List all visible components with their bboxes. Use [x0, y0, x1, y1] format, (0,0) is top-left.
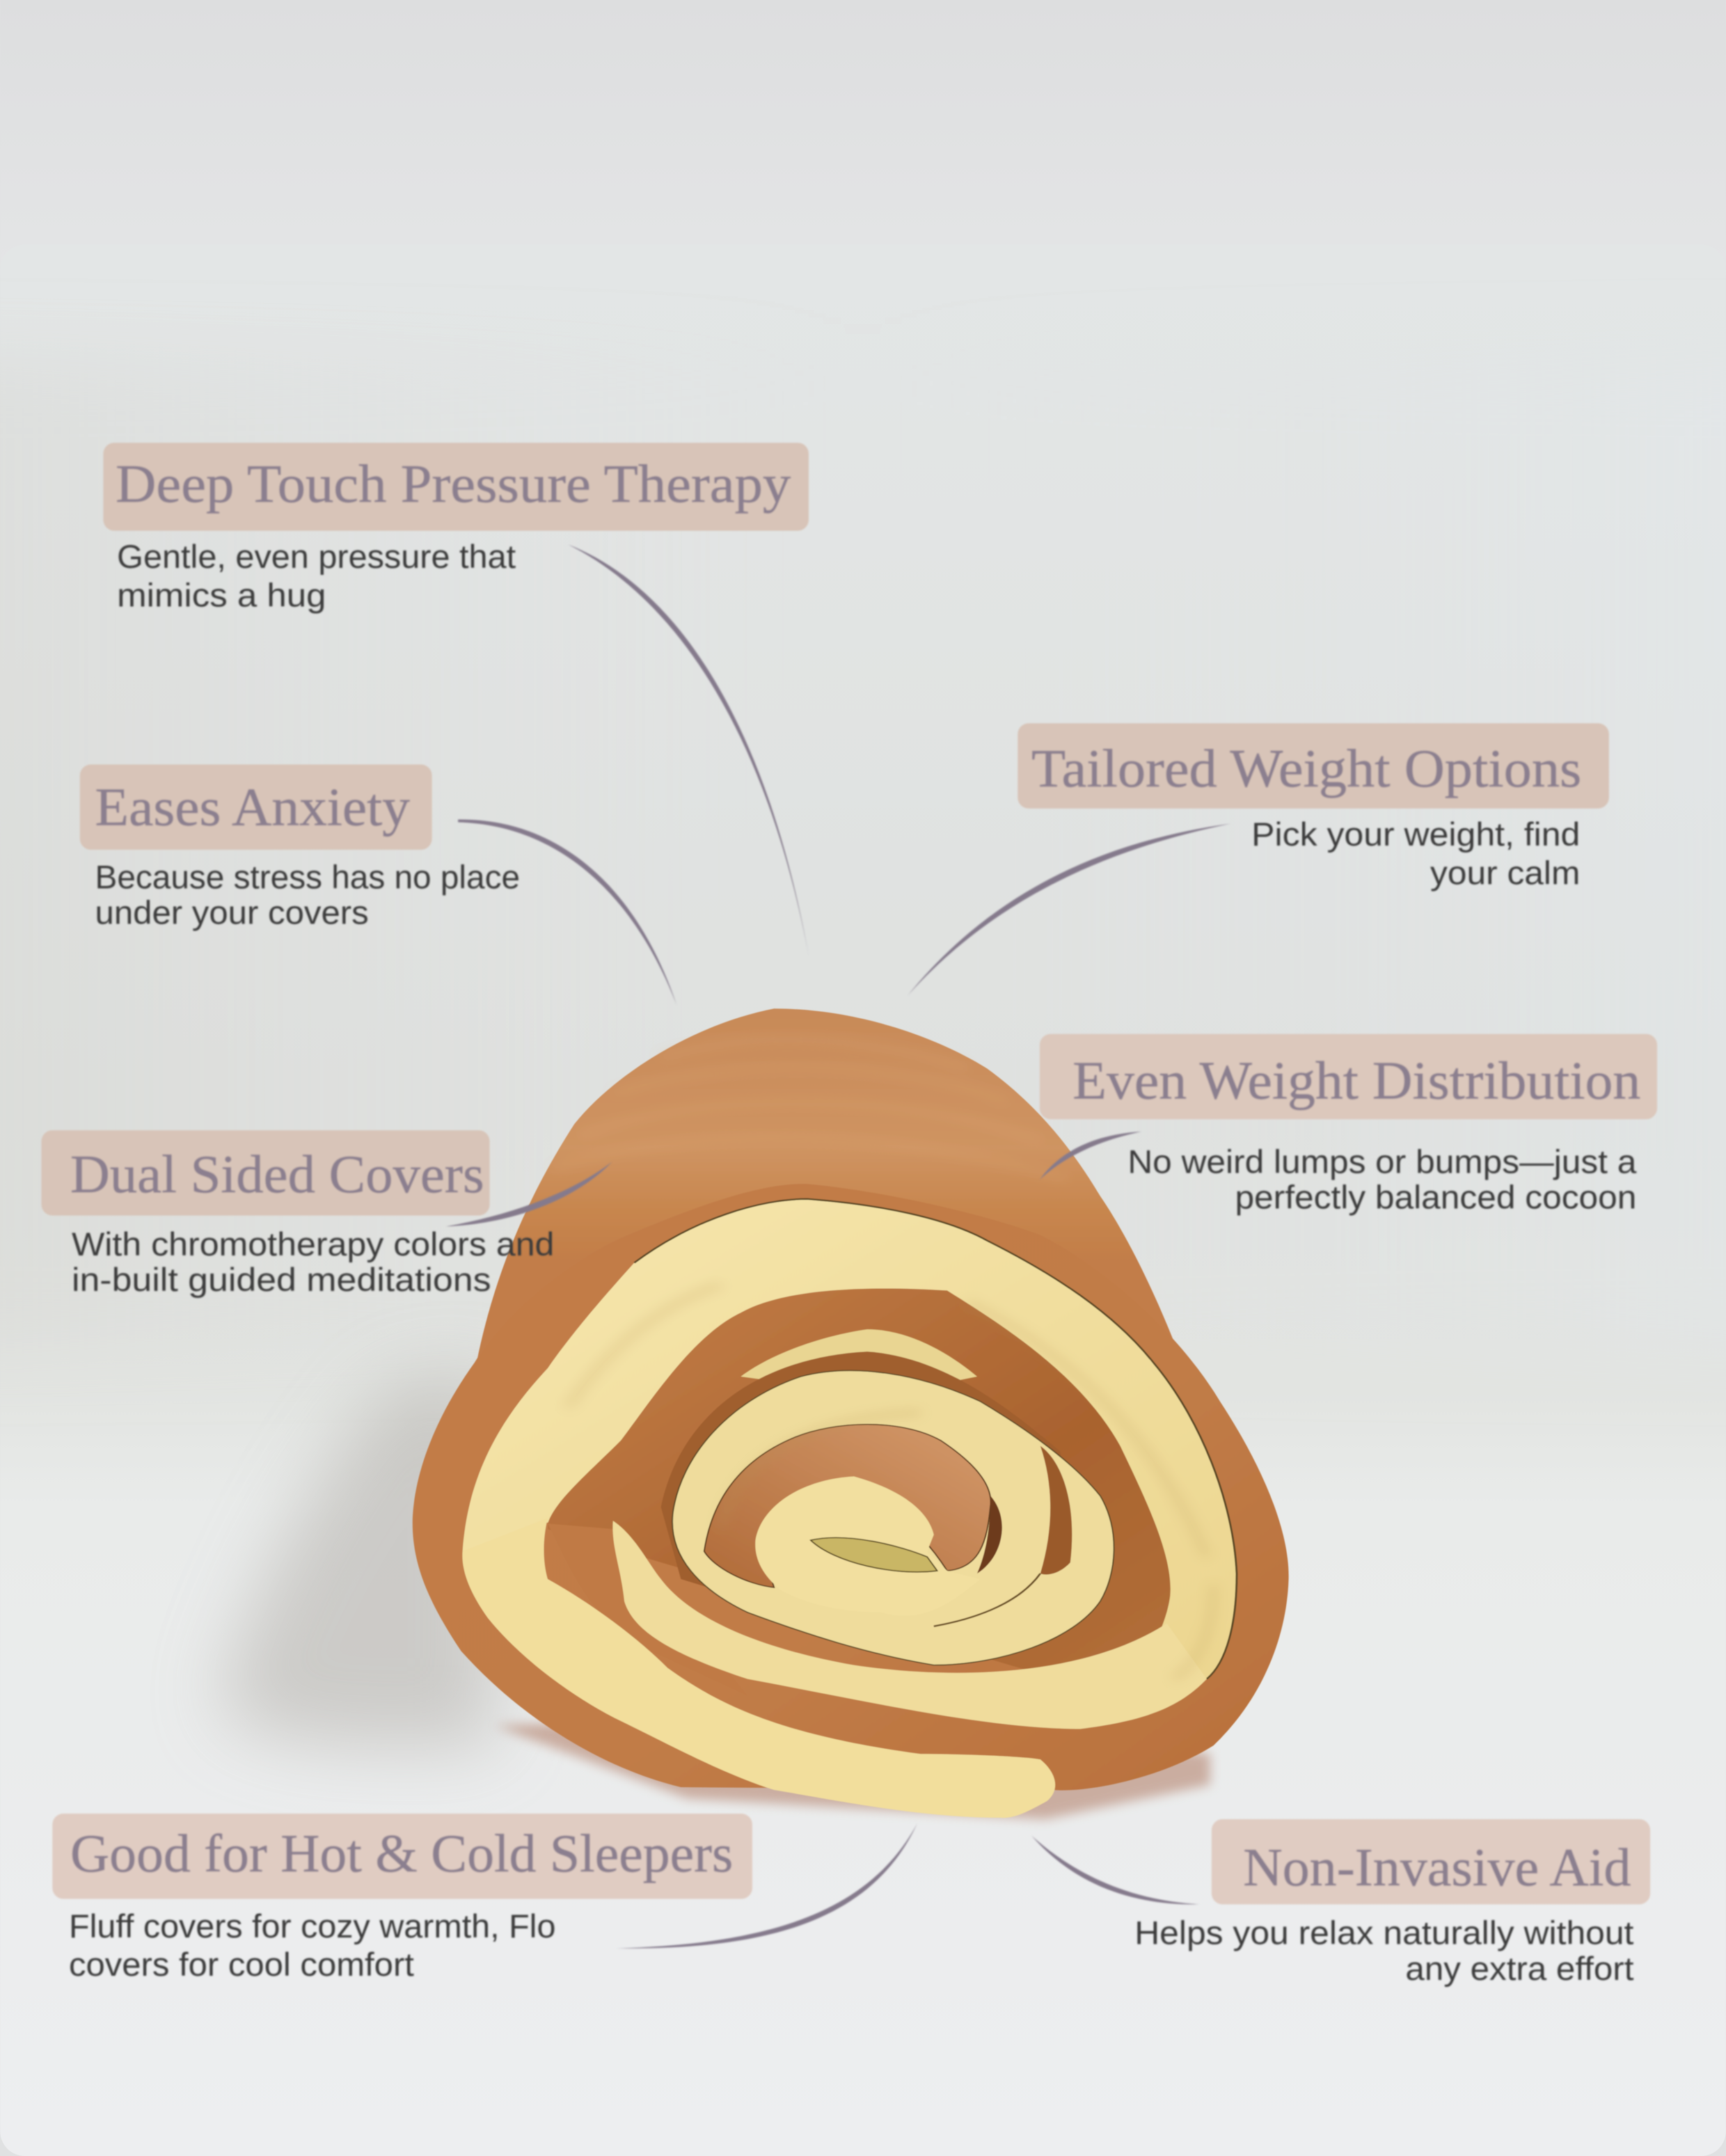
- heading text: Tailored Weight Options: [1031, 738, 1581, 798]
- heading text: Eases Anxiety: [95, 777, 410, 837]
- arrow: dual sided: [445, 1162, 612, 1226]
- heading label: [103, 443, 809, 531]
- callout: Deep Touch Pressure Therapy: [103, 443, 809, 614]
- heading label: [41, 1130, 490, 1216]
- connector curves: [445, 544, 1231, 1949]
- description: No weird lumps or bumps—just a: [1127, 1143, 1637, 1180]
- crease line: [934, 1574, 1040, 1626]
- callout: Tailored Weight Options: [1018, 723, 1609, 891]
- callout: Good for Hot & Cold Sleepers: [52, 1814, 752, 1983]
- crease wedge between ring folds: [1040, 1446, 1072, 1574]
- callout: Eases Anxiety: [80, 765, 520, 932]
- inner orange layer: [548, 1288, 1171, 1695]
- rolled blanket: [413, 1008, 1289, 1818]
- lower yellow band: [612, 1521, 1207, 1729]
- heading text: Dual Sided Covers: [70, 1144, 484, 1204]
- callout: Non-Invasive Aid: any extra effort: [1405, 1951, 1633, 1988]
- callout: Good for Hot & Cold Sleepers: covers for cool comfort: [69, 1947, 414, 1983]
- callout: Dual Sided Covers: [41, 1130, 554, 1299]
- inner dark cavity: [661, 1352, 1077, 1640]
- arrow: hot and cold: [616, 1823, 917, 1949]
- heading label: [80, 765, 432, 850]
- callout: Even Weight Distribution: perfectly balanced cocoon: [1235, 1180, 1636, 1216]
- centre cavity: [811, 1538, 937, 1572]
- heading label: [1040, 1034, 1657, 1119]
- callout: Tailored Weight Options: your calm: [1430, 855, 1580, 891]
- inner orange curl: [704, 1425, 991, 1587]
- callout: Even Weight Distribution: [1040, 1034, 1657, 1216]
- callout: Eases Anxiety: under your covers: [95, 895, 369, 932]
- arrow: even weight: [1040, 1132, 1141, 1180]
- blanket front outer layer: [413, 1184, 1289, 1791]
- heading text: Even Weight Distribution: [1072, 1051, 1640, 1111]
- callout: Dual Sided Covers: in-built guided meditations: [72, 1262, 491, 1299]
- arrow: eases anxiety: [458, 820, 676, 1005]
- lower orange band under yellow: [548, 1523, 747, 1695]
- heading label: [1018, 723, 1609, 809]
- description: With chromotherapy colors and: [72, 1226, 554, 1263]
- inner peek of yellow: [741, 1329, 977, 1396]
- arrow: tailored weight: [908, 823, 1231, 995]
- floor shadow: [220, 1375, 1210, 1819]
- outer yellow ring: [463, 1199, 1237, 1679]
- heading text: Good for Hot & Cold Sleepers: [70, 1823, 733, 1883]
- callout: Deep Touch Pressure Therapy: mimics a hug: [117, 577, 326, 614]
- blanket body: [477, 1008, 1173, 1474]
- heading label: [52, 1814, 752, 1899]
- second yellow ring: [672, 1370, 1114, 1665]
- dark fold at curl tip: [977, 1496, 1002, 1574]
- ring outer edge shadow: [634, 1199, 1237, 1679]
- centre yellow curl: [755, 1476, 981, 1616]
- description: Gentle, even pressure that: [117, 539, 516, 576]
- heading text: Deep Touch Pressure Therapy: [116, 454, 791, 514]
- arrow: non-invasive: [1031, 1836, 1199, 1905]
- description: Helps you relax naturally without: [1134, 1915, 1633, 1952]
- callout: Non-Invasive Aid: [1134, 1819, 1650, 1988]
- top background band: [0, 0, 1726, 275]
- yellow flap: [462, 1518, 1055, 1818]
- heading label: [1212, 1819, 1650, 1904]
- description: Because stress has no place: [95, 859, 520, 896]
- arrow: deep touch: [568, 544, 809, 956]
- description: Fluff covers for cozy warmth, Flo: [69, 1908, 555, 1945]
- heading text: Non-Invasive Aid: [1243, 1837, 1631, 1897]
- fabric shading: [568, 1285, 1213, 1679]
- description: Pick your weight, find: [1251, 816, 1580, 853]
